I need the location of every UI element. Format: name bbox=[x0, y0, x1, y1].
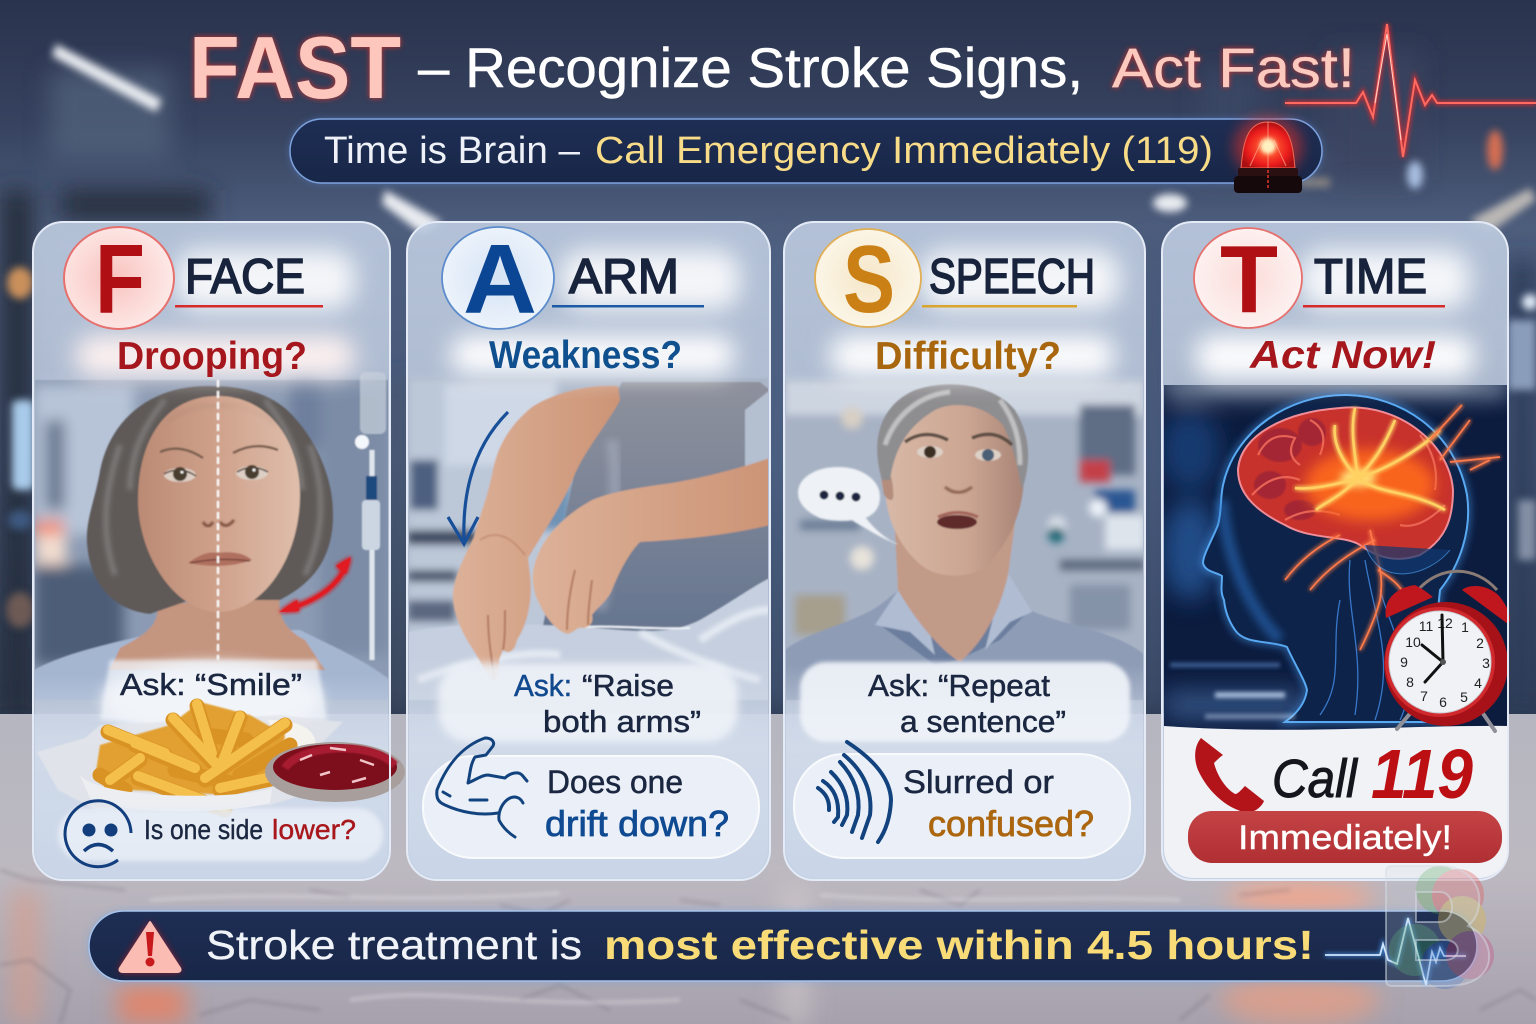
eyes bbox=[160, 446, 278, 482]
speech photo bbox=[785, 380, 1145, 885]
icon: sad face bbox=[65, 801, 131, 867]
header glow bbox=[1195, 250, 1475, 379]
near arm bbox=[453, 386, 620, 681]
panel: arm bbox=[407, 222, 770, 885]
alarm clock: 12 bbox=[1437, 615, 1453, 631]
far arm bbox=[533, 458, 770, 634]
banner yellow text: most effective within 4.5 hours! bbox=[604, 922, 1314, 968]
ask text raise both arms: Ask: bbox=[514, 668, 572, 703]
watermark logo bbox=[1386, 866, 1494, 989]
question: Act Now: Act Now! bbox=[1249, 334, 1436, 377]
alarm clock: 4 bbox=[1474, 675, 1482, 691]
heading badge T bbox=[1194, 226, 1302, 333]
banner white text: Stroke treatment is bbox=[206, 922, 582, 968]
hair bbox=[87, 386, 333, 614]
ask text repeat a sentence: Ask: “Repeat bbox=[868, 668, 1050, 703]
subtitle pill bbox=[290, 119, 1322, 183]
ask text Smile: Ask: “Smile” bbox=[120, 667, 302, 702]
subtitle yellow text: Call Emergency Immediately (119) bbox=[595, 130, 1213, 172]
arm photo bbox=[408, 378, 770, 885]
icon: flexed arm bbox=[437, 738, 527, 837]
ask text raise both arms bbox=[438, 663, 738, 742]
heading badge S: S bbox=[843, 226, 895, 333]
alarm clock: 2 bbox=[1476, 635, 1484, 651]
hair bbox=[877, 384, 1028, 490]
title bbox=[189, 18, 1355, 117]
call panel background bbox=[1164, 726, 1508, 880]
question: Weakness: Weakness? bbox=[489, 334, 682, 377]
brain photo bbox=[1160, 378, 1508, 880]
eyes bbox=[905, 434, 1012, 461]
alarm clock: 7 bbox=[1420, 688, 1428, 704]
neck bbox=[110, 595, 325, 670]
heading TIME: TIME bbox=[1314, 250, 1427, 304]
nose and mouth bbox=[203, 520, 234, 526]
icon: warning triangle bbox=[120, 922, 180, 972]
shirt bbox=[34, 630, 390, 700]
callout: is one side lower: lower? bbox=[272, 814, 356, 845]
ask text repeat a sentence: a sentence” bbox=[900, 704, 1066, 739]
ask text repeat a sentence bbox=[800, 662, 1130, 742]
bottom banner bbox=[89, 911, 1477, 985]
lower veins bbox=[1285, 405, 1500, 650]
shirt bbox=[786, 592, 1143, 700]
alarm clock: 11 bbox=[1419, 618, 1433, 634]
heading badge A: A bbox=[463, 224, 537, 334]
heading badge F: F bbox=[95, 224, 145, 334]
alarm clock: 9 bbox=[1400, 654, 1408, 670]
marble counter bbox=[0, 714, 1536, 1024]
skin bbox=[138, 396, 300, 612]
alarm clock: 1 bbox=[1461, 619, 1469, 635]
heading ARM: ARM bbox=[569, 250, 679, 304]
heading badge F bbox=[64, 224, 174, 334]
callout: slurred or confused bbox=[794, 742, 1130, 858]
header glow bbox=[450, 250, 740, 375]
subtitle white text: Time is Brain – bbox=[324, 130, 581, 172]
shirt bbox=[540, 382, 770, 640]
icon: phone bbox=[1195, 738, 1264, 813]
food photo: fries and ketchup bbox=[37, 702, 405, 812]
header glow bbox=[830, 250, 1120, 377]
callout: is one side lower: Is one side bbox=[144, 814, 263, 845]
nose and mouth bbox=[945, 487, 972, 492]
ask text raise both arms: “Raise bbox=[582, 668, 674, 703]
heading badge T: T bbox=[1220, 226, 1278, 333]
question: Difficulty: Difficulty? bbox=[875, 335, 1061, 378]
callout: slurred or confused: confused? bbox=[928, 803, 1094, 844]
brain bbox=[1238, 405, 1500, 650]
icon: small heartbeat bbox=[1325, 918, 1466, 985]
face photo bbox=[34, 372, 390, 885]
heading badge S bbox=[815, 226, 921, 333]
neck bbox=[894, 523, 1016, 662]
callout: slurred or confused: Slurred or bbox=[903, 764, 1054, 800]
ask text raise both arms: both arms” bbox=[543, 704, 701, 739]
alarm clock: 3 bbox=[1482, 655, 1490, 671]
blue nerves bbox=[1320, 560, 1407, 720]
title word FAST: FAST bbox=[189, 18, 401, 117]
alarm clock: 6 bbox=[1439, 694, 1447, 710]
heading SPEECH: SPEECH bbox=[929, 250, 1095, 304]
icon: heartbeat line bbox=[1285, 24, 1536, 157]
call text block: Call bbox=[1272, 749, 1359, 809]
icon: sound waves bbox=[818, 742, 891, 842]
heading FACE: FACE bbox=[185, 250, 305, 304]
alarm clock bbox=[1384, 571, 1510, 731]
speech bubble bbox=[798, 467, 897, 544]
alarm clock: 10 bbox=[1405, 634, 1421, 650]
IV drip bbox=[355, 372, 386, 660]
panel: face bbox=[33, 222, 405, 885]
callout: does one drift down: Does one bbox=[547, 764, 683, 800]
panel: speech bbox=[784, 222, 1145, 885]
head silhouette bbox=[1203, 395, 1468, 722]
icon: red siren bbox=[1234, 117, 1302, 193]
reflective table streaks bbox=[1170, 663, 1295, 719]
sheet bbox=[408, 578, 770, 700]
arrow: arm drifting down bbox=[448, 412, 508, 544]
call text block: 119 bbox=[1371, 735, 1473, 813]
question: Drooping: Drooping? bbox=[117, 335, 307, 378]
button: immediately bbox=[1188, 811, 1502, 863]
double arrow: droop bbox=[279, 557, 351, 612]
title middle text: – Recognize Stroke Signs, bbox=[418, 36, 1083, 99]
call text block bbox=[1188, 735, 1502, 863]
button: immediately: Immediately! bbox=[1238, 819, 1452, 857]
callout: does one drift down: drift down? bbox=[545, 803, 729, 844]
alarm clock: 8 bbox=[1406, 674, 1414, 690]
callout: does one drift down bbox=[423, 738, 759, 858]
title act fast: Act Fast! bbox=[1112, 36, 1355, 99]
panel: time bbox=[1160, 222, 1510, 880]
alarm clock: 5 bbox=[1460, 689, 1468, 705]
header glow bbox=[75, 250, 355, 377]
callout: is one side lower bbox=[58, 801, 383, 867]
heading badge A bbox=[442, 224, 554, 334]
head bbox=[886, 403, 1024, 576]
card borders bbox=[33, 222, 1508, 880]
